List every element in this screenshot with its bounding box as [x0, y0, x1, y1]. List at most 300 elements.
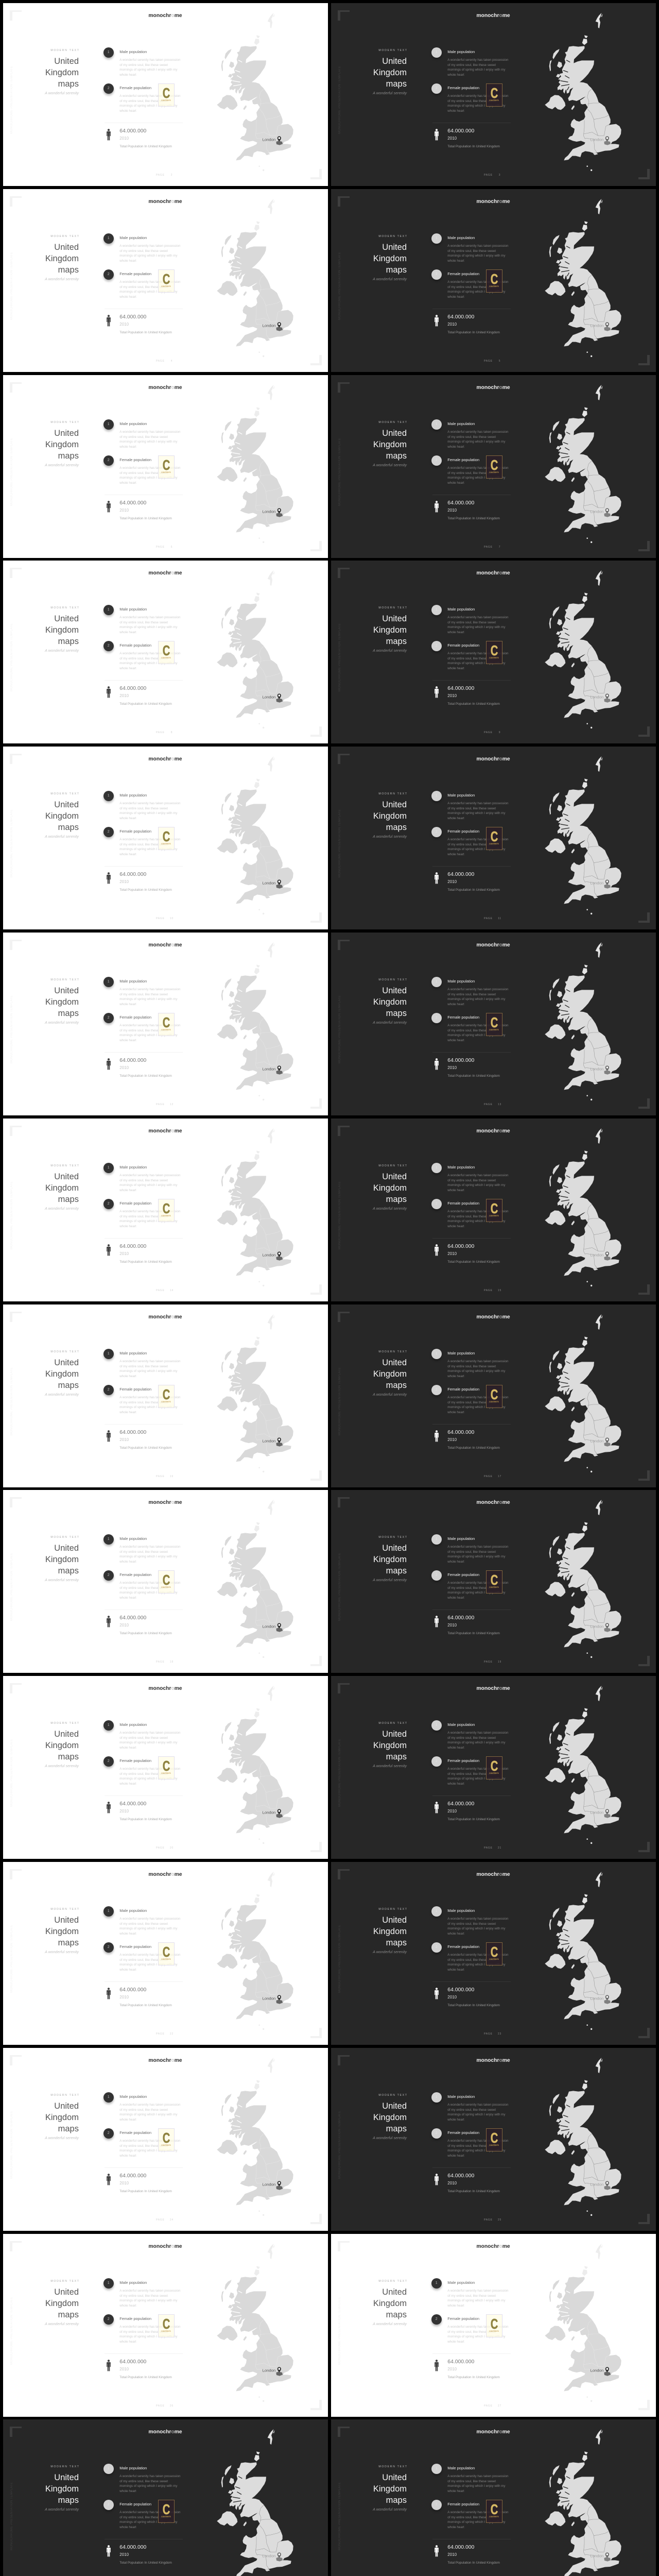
item: male population: A wonderful serenity has taken possession: [119, 1174, 180, 1177]
logo: monochrome: [476, 570, 510, 576]
slide 12 right: [331, 2048, 656, 2231]
heading: maps: [386, 2124, 407, 2133]
page number: PAGE: [156, 731, 165, 734]
item: female population: [431, 1012, 512, 1046]
slide 12 right: MONOCHROME PRESENTATION TEMPLATE: [338, 2111, 341, 2179]
item: female population: Female population: [447, 1572, 479, 1577]
page number: PAGE: [156, 1103, 165, 1106]
item: female population: whole heart: [447, 2340, 464, 2344]
page number: 16: [170, 1475, 174, 1478]
heading: United: [54, 243, 79, 252]
watermark: C: [490, 1386, 498, 1402]
slide 8 left: MONOCHROME PRESENTATION TEMPLATE: [10, 1367, 13, 1435]
item: male population: A wonderful serenity has taken possession: [447, 802, 508, 805]
watermark: [158, 269, 174, 293]
UK map: [197, 557, 331, 743]
item: male population: of my entire soul, like these sweet: [447, 1365, 496, 1368]
slide 4 left: MONOCHROME PRESENTATION TEMPLATE: [10, 623, 13, 691]
item: female population: Female population: [447, 2316, 479, 2321]
item: female population: A wonderful serenity has taken possession: [119, 838, 180, 841]
item: female population: A wonderful serenity has taken possession: [447, 1024, 508, 1027]
logo: monochrome: [148, 199, 182, 205]
heading: Kingdom: [45, 2484, 79, 2494]
page number: 7: [499, 546, 500, 549]
heading: [34, 1164, 79, 1211]
slide 9 left: [3, 1490, 328, 1673]
item: female population: whole heart: [119, 1782, 136, 1786]
item: male population: of my entire soul, like these sweet: [447, 621, 496, 624]
heading: A wonderful serenity: [45, 2321, 79, 2326]
item: female population: Female population: [447, 2502, 479, 2506]
item: male population: Male population: [119, 793, 147, 798]
item: male population: Male population: [447, 607, 475, 612]
page number: [484, 2218, 502, 2222]
item: male population: of my entire soul, like these sweet: [119, 993, 168, 996]
watermark: CONTENTS: [161, 657, 171, 659]
item: female population: mornings of spring which I enjoy with my: [119, 104, 177, 108]
item: male population: A wonderful serenity has taken possession: [447, 2289, 508, 2293]
item: male population: whole heart: [119, 1003, 136, 1006]
total population stat: 64.000.000: [447, 1987, 474, 1993]
item: female population: A wonderful serenity has taken possession: [447, 1953, 508, 1957]
logo: monochrome: [148, 2429, 182, 2435]
item: male population: Male population: [447, 2094, 475, 2099]
item: female population: Female population: [119, 457, 151, 462]
slide 4 right: [331, 561, 656, 743]
item: female population: of my entire soul, like these sweet: [447, 1958, 496, 1962]
watermark: [486, 827, 502, 850]
logo: monochrome: [148, 385, 182, 391]
heading: A wonderful serenity: [373, 277, 407, 281]
item: female population: 2: [436, 1202, 438, 1206]
UK map: London: [591, 1624, 603, 1629]
heading: [373, 235, 408, 281]
item: female population: A wonderful serenity has taken possession: [447, 2139, 508, 2143]
item: female population: of my entire soul, like these sweet: [447, 1215, 496, 1218]
page number: [156, 1660, 175, 1664]
item: female population: whole heart: [119, 2526, 136, 2529]
item: female population: A wonderful serenity has taken possession: [447, 1396, 508, 1399]
item: female population: A wonderful serenity has taken possession: [119, 1581, 180, 1585]
item: male population: mornings of spring which I enjoy with my: [119, 625, 177, 629]
item: female population: A wonderful serenity has taken possession: [119, 280, 180, 284]
item: male population: Male population: [447, 421, 475, 426]
item: female population: whole heart: [119, 1411, 136, 1414]
total population stat: Total Population In United Kingdom: [119, 2004, 172, 2007]
item: female population: whole heart: [119, 1039, 136, 1042]
item: female population: [103, 1570, 184, 1603]
item: female population: 2: [108, 1016, 110, 1020]
UK map: [197, 1673, 331, 1859]
heading: United: [382, 1916, 407, 1925]
watermark: CONTENTS: [489, 1586, 499, 1588]
item: female population: whole heart: [119, 853, 136, 856]
item: male population: Male population: [119, 979, 147, 984]
item: female population: [102, 269, 180, 299]
heading: Kingdom: [45, 2113, 79, 2122]
slide 9 left: MONOCHROME PRESENTATION TEMPLATE: [10, 1553, 13, 1621]
slide 3 left: MONOCHROME PRESENTATION TEMPLATE: [10, 438, 13, 506]
heading: Kingdom: [45, 254, 79, 263]
total population stat: 2010: [447, 693, 457, 698]
item: male population: A wonderful serenity has taken possession: [119, 2475, 180, 2478]
slide 9 right: MONOCHROME PRESENTATION TEMPLATE: [338, 1553, 341, 1621]
heading: MODERN TEXT: [378, 1536, 408, 1539]
total population stat: 64.000.000: [119, 1801, 146, 1807]
watermark: [158, 1570, 174, 1594]
UK map: [545, 199, 621, 357]
watermark: C: [162, 1014, 170, 1030]
heading: A wonderful serenity: [45, 1578, 79, 1582]
heading: MODERN TEXT: [378, 235, 408, 238]
item: female population: mornings of spring which I enjoy with my: [447, 2149, 506, 2153]
total population stat: 64.000.000: [447, 2545, 474, 2550]
page number: 18: [170, 1660, 174, 1664]
page number: 19: [498, 1660, 501, 1664]
item: male population: of my entire soul, like these sweet: [119, 1736, 168, 1740]
UK map: London: [263, 2182, 275, 2187]
total population stat: 64.000.000: [447, 128, 474, 134]
heading: [362, 1164, 407, 1211]
slide 5 right: MONOCHROME PRESENTATION TEMPLATE: [338, 809, 341, 877]
heading: maps: [386, 1566, 407, 1575]
heading: [362, 2093, 407, 2141]
heading: Kingdom: [45, 811, 79, 821]
total population stat: 64.000.000: [119, 2359, 146, 2365]
watermark: [486, 269, 502, 293]
slide 6 left: MONOCHROME PRESENTATION TEMPLATE: [10, 995, 13, 1063]
page number: [156, 1846, 175, 1850]
item: male population: of my entire soul, like these sweet: [119, 807, 168, 810]
page number: PAGE: [156, 1475, 165, 1478]
item: female population: [431, 826, 512, 860]
item: female population: of my entire soul, like these sweet: [447, 2516, 496, 2519]
item: male population: Male population: [447, 1536, 475, 1541]
logo: monochrome: [476, 756, 510, 762]
item: male population: [431, 419, 509, 449]
item: male population: mornings of spring which I enjoy with my: [119, 1741, 177, 1744]
total population stat: 2010: [447, 322, 457, 327]
item: female population: A wonderful serenity has taken possession: [447, 2511, 508, 2514]
total population stat: 2010: [119, 1809, 129, 1814]
item: male population: [431, 604, 512, 638]
logo: monochrome: [148, 942, 182, 948]
item: male population: A wonderful serenity has taken possession: [119, 2103, 180, 2107]
item: female population: mornings of spring which I enjoy with my: [447, 1777, 506, 1781]
page number: [484, 1103, 502, 1106]
total population stat: 64.000.000: [119, 500, 146, 506]
item: female population: mornings of spring which I enjoy with my: [119, 476, 177, 480]
total population stat: 2010: [447, 1437, 457, 1442]
heading: maps: [58, 1381, 79, 1390]
logo: monochrome: [148, 1872, 182, 1877]
item: male population: mornings of spring which I enjoy with my: [447, 811, 506, 815]
heading: maps: [386, 1938, 407, 1947]
total population stat: Total Population In United Kingdom: [447, 2376, 500, 2379]
page number: 3: [499, 174, 500, 177]
item: female population: Female population: [119, 1572, 151, 1577]
heading: Kingdom: [45, 68, 79, 77]
item: male population: of my entire soul, like these sweet: [119, 1922, 168, 1926]
heading: MODERN TEXT: [50, 1908, 80, 1911]
total population stat: Total Population In United Kingdom: [119, 2376, 172, 2379]
heading: maps: [386, 1195, 407, 1204]
item: male population: whole heart: [119, 1746, 136, 1750]
item: male population: 1: [436, 1352, 438, 1355]
item: female population: Female population: [119, 2316, 151, 2321]
heading: United: [54, 1544, 79, 1553]
heading: A wonderful serenity: [45, 834, 79, 839]
item: female population: [431, 2499, 512, 2533]
item: female population: A wonderful serenity has taken possession: [119, 1210, 180, 1213]
item: male population: 1: [108, 2095, 110, 2099]
heading: [362, 2279, 407, 2327]
item: female population: A wonderful serenity has taken possession: [447, 838, 508, 841]
slide 1 left: [3, 3, 328, 186]
item: male population: 1: [436, 794, 438, 798]
heading: United: [54, 800, 79, 809]
heading: A wonderful serenity: [373, 91, 407, 95]
item: female population: of my entire soul, like these sweet: [447, 1029, 496, 1032]
watermark: CONTENTS: [161, 1586, 171, 1588]
heading: A wonderful serenity: [373, 1392, 407, 1397]
UK map: London: [263, 2554, 275, 2558]
item: female population: A wonderful serenity has taken possession: [447, 2325, 508, 2329]
page number: PAGE: [156, 2218, 165, 2222]
UK map: [525, 557, 659, 743]
item: female population: mornings of spring which I enjoy with my: [447, 290, 506, 294]
watermark: C: [162, 2501, 170, 2517]
logo: monochrome: [148, 1686, 182, 1691]
heading: [34, 1907, 79, 1955]
item: male population: [431, 1348, 512, 1382]
logo: monochrome: [148, 2244, 182, 2249]
item: female population: whole heart: [447, 1782, 464, 1786]
heading: maps: [58, 265, 79, 275]
item: female population: mornings of spring which I enjoy with my: [447, 104, 506, 108]
UK map: [525, 1115, 659, 1301]
watermark: C: [490, 85, 498, 101]
page number: PAGE: [156, 1846, 165, 1850]
item: female population: Female population: [119, 86, 151, 90]
heading: United: [54, 614, 79, 623]
item: female population: Female population: [447, 829, 479, 834]
item: female population: 2: [436, 1016, 438, 1020]
item: female population: 2: [436, 2503, 438, 2506]
item: female population: mornings of spring which I enjoy with my: [119, 2149, 177, 2153]
watermark: [158, 1942, 174, 1965]
watermark: CONTENTS: [489, 1772, 499, 1774]
page number: PAGE: [484, 1475, 493, 1478]
item: male population: mornings of spring which I enjoy with my: [447, 1183, 506, 1187]
item: male population: of my entire soul, like these sweet: [447, 1922, 496, 1926]
item: male population: A wonderful serenity has taken possession: [447, 58, 508, 62]
watermark: CONTENTS: [489, 1029, 499, 1031]
heading: Kingdom: [45, 440, 79, 449]
item: male population: whole heart: [447, 1375, 464, 1378]
heading: A wonderful serenity: [45, 1764, 79, 1768]
heading: [34, 1350, 79, 1397]
item: male population: of my entire soul, like these sweet: [447, 2108, 496, 2112]
item: male population: Male population: [447, 1722, 475, 1727]
item: female population: whole heart: [447, 1411, 464, 1414]
total population stat: Total Population In United Kingdom: [447, 2561, 500, 2565]
total population stat: 2010: [119, 2552, 129, 2557]
UK map: London: [591, 2368, 603, 2373]
item: female population: 2: [436, 459, 438, 462]
heading: maps: [386, 1752, 407, 1761]
item: female population: mornings of spring which I enjoy with my: [447, 1219, 506, 1223]
heading: MODERN TEXT: [50, 1350, 80, 1353]
total population stat: [103, 1986, 184, 2009]
item: female population: whole heart: [119, 1596, 136, 1600]
page number: PAGE: [484, 2218, 493, 2222]
heading: A wonderful serenity: [45, 1020, 79, 1025]
total population stat: 2010: [119, 693, 129, 698]
total population stat: [103, 2543, 184, 2567]
page number: 13: [498, 1103, 501, 1106]
item: male population: [102, 419, 180, 449]
UK map: London: [591, 1067, 603, 1072]
heading: Kingdom: [373, 811, 407, 821]
item: male population: [431, 1720, 512, 1753]
total population stat: [431, 1056, 512, 1080]
total population stat: [107, 314, 172, 334]
item: female population: whole heart: [119, 2154, 136, 2158]
total population stat: Total Population In United Kingdom: [447, 331, 500, 334]
UK map: London: [591, 695, 603, 700]
heading: Kingdom: [373, 1183, 407, 1193]
item: male population: mornings of spring which I enjoy with my: [447, 1741, 506, 1744]
logo: monochrome: [476, 1686, 510, 1691]
item: female population: 2: [108, 273, 110, 276]
item: male population: [103, 790, 184, 824]
total population stat: 2010: [447, 1623, 457, 1628]
item: female population: whole heart: [447, 1039, 464, 1042]
heading: A wonderful serenity: [45, 277, 79, 281]
heading: A wonderful serenity: [373, 1950, 407, 1954]
UK map: [525, 1859, 659, 2045]
item: male population: mornings of spring which I enjoy with my: [447, 440, 506, 444]
item: male population: 1: [436, 2281, 438, 2285]
watermark: CONTENTS: [161, 1401, 171, 1403]
total population stat: [431, 2358, 512, 2381]
total population stat: 2010: [119, 1995, 129, 1999]
item: male population: whole heart: [447, 73, 464, 77]
heading: maps: [58, 79, 79, 89]
item: male population: mornings of spring which I enjoy with my: [119, 1927, 177, 1930]
total population stat: 2010: [119, 1437, 129, 1442]
watermark: CONTENTS: [489, 1958, 499, 1960]
item: male population: Male population: [119, 1908, 147, 1913]
page number: [156, 1475, 175, 1478]
item: female population: A wonderful serenity has taken possession: [119, 2325, 180, 2329]
total population stat: 2010: [447, 2552, 457, 2557]
slide 14 right: MONOCHROME PRESENTATION TEMPLATE: [338, 2482, 341, 2550]
watermark: [486, 2314, 502, 2337]
total population stat: 2010: [119, 322, 129, 327]
item: female population: 2: [436, 2317, 438, 2321]
item: female population: A wonderful serenity has taken possession: [447, 280, 508, 284]
heading: MODERN TEXT: [378, 606, 408, 609]
item: male population: 1: [108, 422, 110, 426]
watermark: [486, 2128, 502, 2151]
logo: monochrome: [148, 1128, 182, 1134]
watermark: [486, 1756, 502, 1780]
UK map: [525, 372, 659, 558]
UK map: London: [263, 324, 275, 328]
page number: [484, 731, 502, 734]
item: female population: of my entire soul, like these sweet: [119, 1586, 168, 1590]
item: male population: of my entire soul, like these sweet: [447, 807, 496, 810]
item: female population: of my entire soul, like these sweet: [447, 2144, 496, 2148]
item: female population: 2: [108, 2503, 110, 2506]
watermark: C: [490, 642, 498, 658]
heading: United: [382, 2102, 407, 2111]
logo: monochrome: [148, 756, 182, 762]
watermark: CONTENTS: [161, 1958, 171, 1960]
slide 5 left: MONOCHROME PRESENTATION TEMPLATE: [10, 809, 13, 877]
item: female population: A wonderful serenity has taken possession: [119, 1024, 180, 1027]
heading: [362, 792, 407, 839]
total population stat: Total Population In United Kingdom: [447, 1818, 500, 1821]
page number: 9: [499, 731, 500, 734]
heading: A wonderful serenity: [45, 91, 79, 95]
item: female population: [103, 2314, 184, 2347]
UK map: London: [263, 695, 275, 700]
heading: MODERN TEXT: [50, 49, 80, 52]
item: male population: [103, 2092, 184, 2125]
heading: maps: [58, 1938, 79, 1947]
item: female population: 2: [108, 2131, 110, 2135]
item: female population: [102, 83, 180, 113]
item: male population: 1: [108, 1166, 110, 1170]
UK map: [525, 1487, 659, 1673]
UK map: [525, 2231, 659, 2417]
item: male population: of my entire soul, like these sweet: [119, 63, 168, 67]
slide 1 right: MONOCHROME PRESENTATION TEMPLATE: [338, 66, 341, 134]
heading: maps: [58, 637, 79, 646]
heading: A wonderful serenity: [373, 1020, 407, 1025]
item: female population: A wonderful serenity has taken possession: [447, 1581, 508, 1585]
logo: monochrome: [148, 1314, 182, 1320]
item: female population: Female population: [447, 643, 479, 648]
total population stat: 64.000.000: [447, 500, 474, 506]
item: male population: [431, 2463, 512, 2497]
watermark: [158, 827, 174, 850]
item: male population: Male population: [119, 1351, 147, 1355]
logo: monochrome: [148, 570, 182, 576]
heading: Kingdom: [45, 997, 79, 1007]
logo: monochrome: [148, 1500, 182, 1505]
item: female population: [431, 1942, 512, 1975]
page number: 15: [498, 1289, 501, 1292]
item: female population: Female population: [447, 1944, 479, 1949]
total population stat: Total Population In United Kingdom: [119, 702, 172, 706]
heading: Kingdom: [373, 254, 407, 263]
total population stat: [431, 2172, 512, 2195]
item: male population: of my entire soul, like these sweet: [119, 621, 168, 624]
total population stat: [435, 314, 500, 334]
heading: United: [382, 614, 407, 623]
UK map: [217, 13, 293, 171]
page number: 24: [170, 2218, 174, 2222]
slide 13 right: [331, 2234, 656, 2417]
page number: 5: [499, 360, 500, 363]
page number: PAGE: [484, 360, 493, 363]
watermark: C: [162, 1386, 170, 1402]
heading: A wonderful serenity: [373, 1764, 407, 1768]
